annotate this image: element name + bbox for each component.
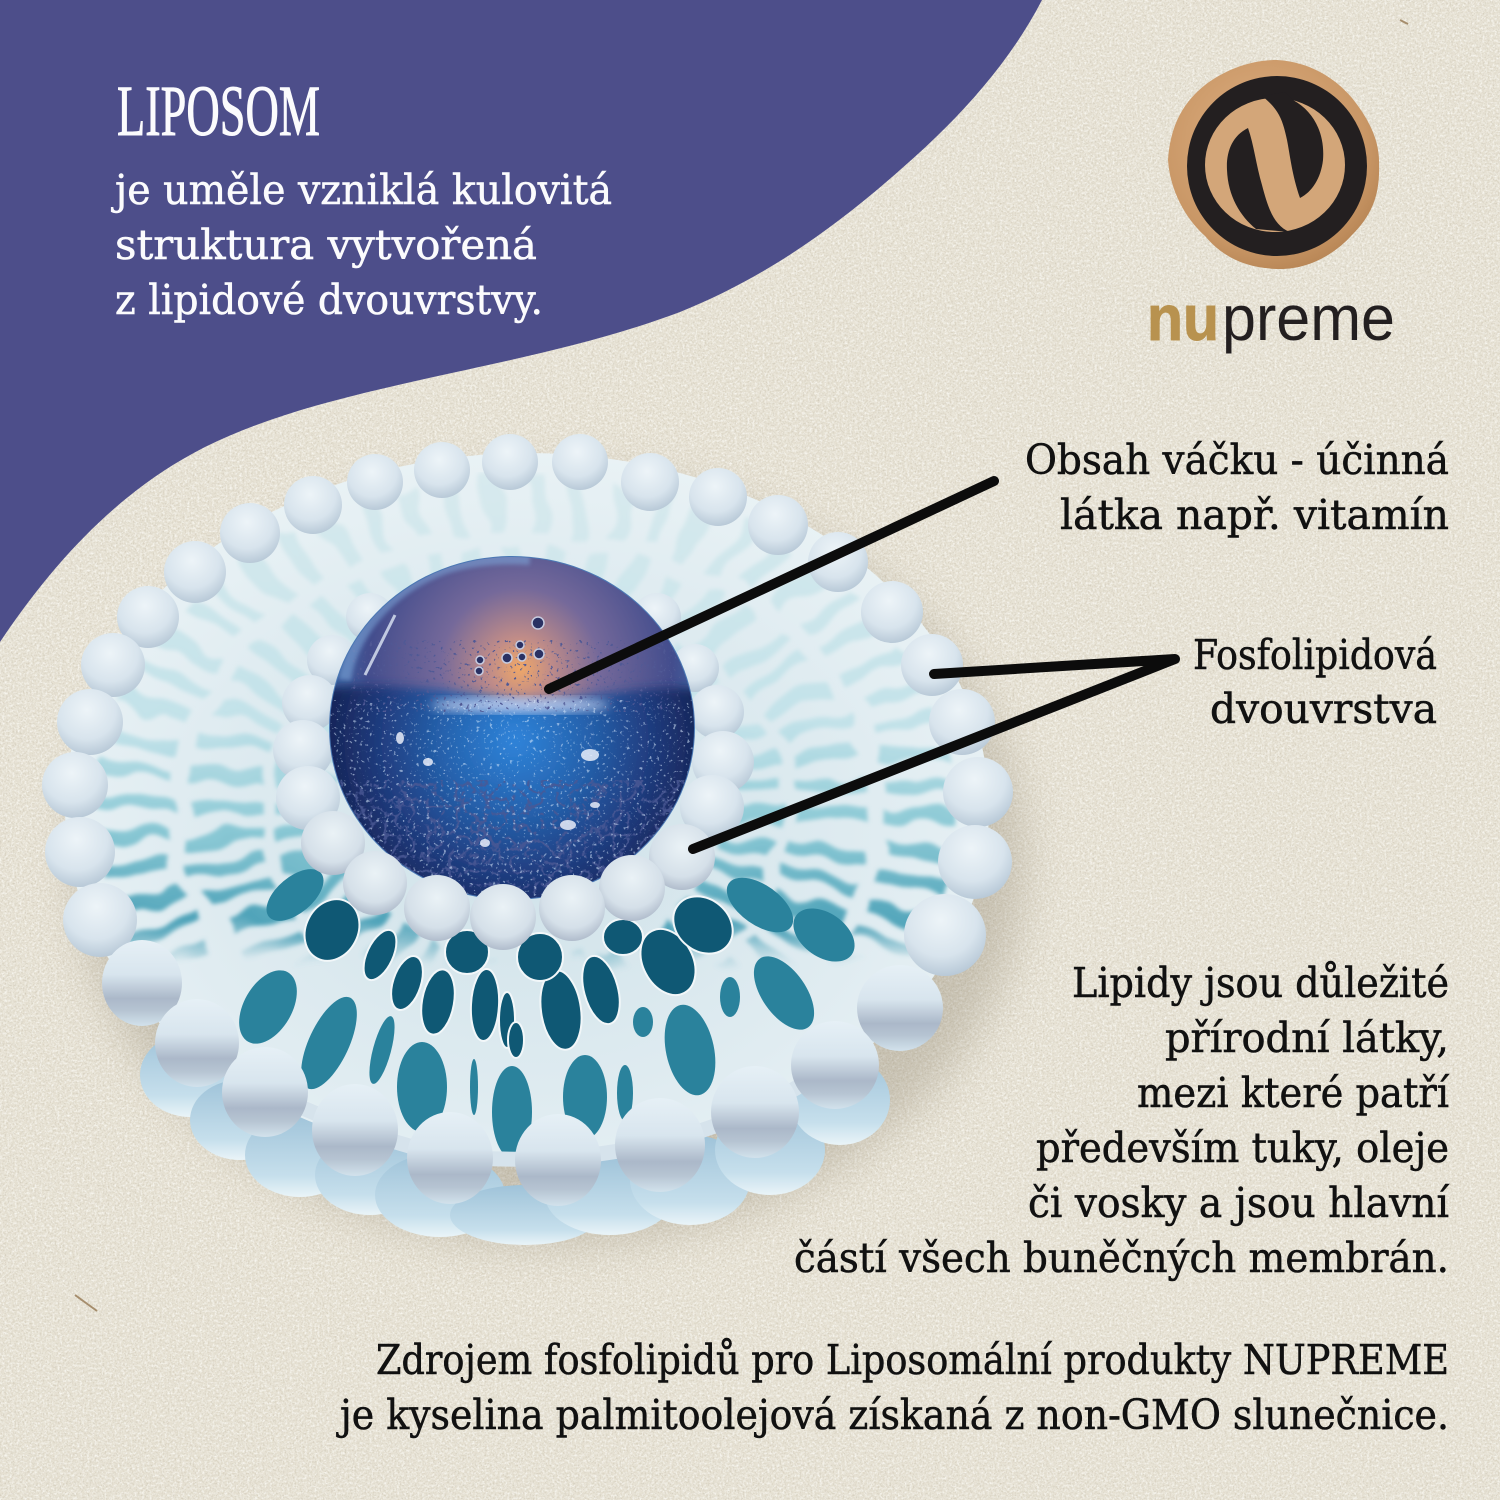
text block: lipids: mezi které patří — [1137, 1069, 1450, 1117]
intro text: struktura vytvořená — [115, 221, 537, 269]
text: vesicle contents — [1025, 436, 1449, 539]
wordmark: preme — [1222, 282, 1395, 354]
text block: lipids: Lipidy jsou důležité — [1072, 959, 1449, 1007]
text block: lipids: přírodní látky, — [1165, 1014, 1449, 1062]
arrow: vesicle contents — [549, 481, 994, 689]
text block: lipids — [794, 959, 1450, 1282]
label 1: vesicle contents — [549, 436, 1449, 689]
lower membrane holes, deep — [294, 885, 744, 1058]
drop shadow — [75, 475, 1025, 1245]
text: vesicle contents: látka např. vitamín — [1060, 491, 1449, 539]
text block: lipids: či vosky a jsou hlavní — [1028, 1179, 1450, 1227]
lower membrane lobes — [140, 1033, 890, 1245]
front bead connector — [142, 983, 900, 1160]
label 2: phospholipid bilayer — [693, 631, 1437, 849]
membrane disc — [65, 453, 989, 1163]
intro text: z lipidové dvouvrstvy. — [115, 276, 543, 324]
front inner lipid heads — [301, 811, 715, 950]
wordmark: nu — [1147, 282, 1219, 354]
purple wave panel — [0, 0, 1042, 642]
text: bilayer: Fosfolipidová — [1193, 631, 1437, 679]
text: bilayer — [1193, 631, 1437, 733]
back outer lipid heads — [42, 434, 1013, 976]
logo emblem — [1168, 60, 1379, 269]
text block: phospholipid source — [336, 1336, 1449, 1439]
heading: LIPOSOM: LIPOSOM — [117, 71, 320, 151]
text: bilayer: dvouvrstva — [1210, 685, 1437, 733]
text: vesicle contents: Obsah váčku - účinná — [1025, 436, 1449, 484]
liposome illustration — [42, 434, 1025, 1245]
central vesicle sphere — [329, 556, 695, 899]
wordmark — [1147, 282, 1395, 354]
logo: nupreme — [1147, 60, 1395, 354]
lower membrane holes, mid — [227, 859, 864, 1158]
front outer lipid heads — [102, 940, 943, 1206]
intro text — [111, 166, 612, 324]
arrows: bilayer — [693, 659, 1175, 849]
back inner lipid heads — [273, 593, 754, 839]
text block: lipids: především tuky, oleje — [1036, 1124, 1449, 1172]
intro text: je uměle vzniklá kulovitá — [111, 166, 612, 214]
text block: lipids: částí všech buněčných membrán. — [794, 1234, 1449, 1282]
radial membrane slits — [132, 503, 922, 1119]
